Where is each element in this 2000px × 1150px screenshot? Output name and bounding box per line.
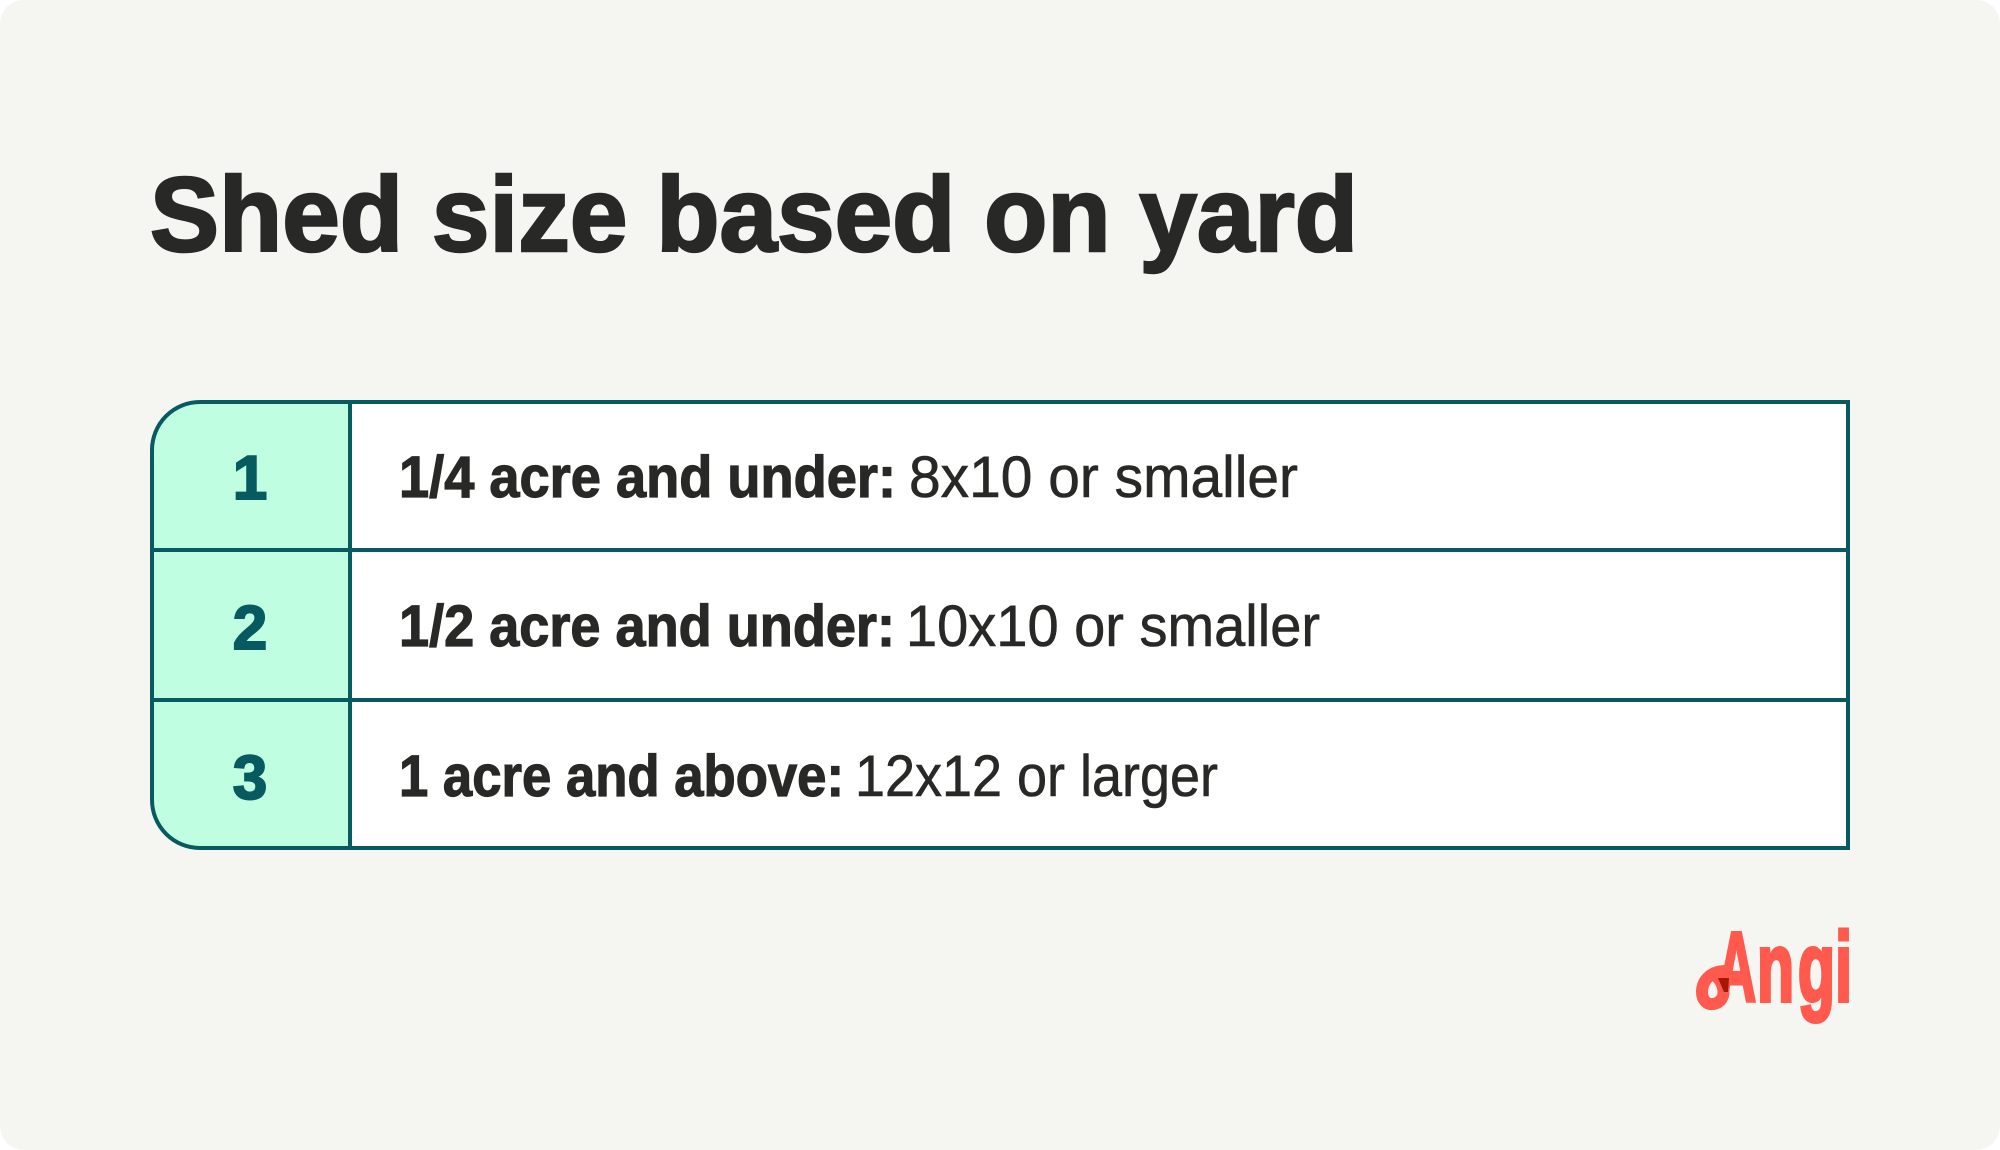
row 1 text: 1/4 acre and under: <box>399 445 896 510</box>
row 1 text: 8x10 or smaller <box>909 445 1298 510</box>
Angi logo <box>1702 912 1852 1023</box>
row 2 number: 2 <box>233 594 267 663</box>
logo leg cutout <box>1712 980 1742 1012</box>
row 3 text: 12x12 or larger <box>855 744 1218 809</box>
row 1 text <box>399 445 1298 510</box>
logo loop <box>1702 971 1726 1004</box>
row 3 number: 3 <box>233 744 267 813</box>
row 2 text: 10x10 or smaller <box>906 594 1320 659</box>
row 1 <box>233 444 1298 513</box>
logo wordmark <box>1717 912 1852 1023</box>
row 3 text <box>399 744 1218 809</box>
table <box>152 402 1848 848</box>
table content column fill <box>350 402 1847 848</box>
row 3 text: 1 acre and above: <box>399 744 844 809</box>
logo loop shadow <box>1718 978 1729 992</box>
row 2 text: 1/2 acre and under: <box>399 594 895 659</box>
table outline and row dividers <box>152 402 1848 848</box>
row 1 number: 1 <box>233 444 267 513</box>
title: Shed size based on yard <box>150 156 1358 274</box>
table number column fill <box>152 402 350 848</box>
row 2 <box>233 594 1320 663</box>
logo wordmark: A <box>1717 912 1756 1022</box>
row 2 text <box>399 594 1320 659</box>
logo wordmark: ngi <box>1757 913 1852 1023</box>
row 3 <box>233 744 1218 813</box>
